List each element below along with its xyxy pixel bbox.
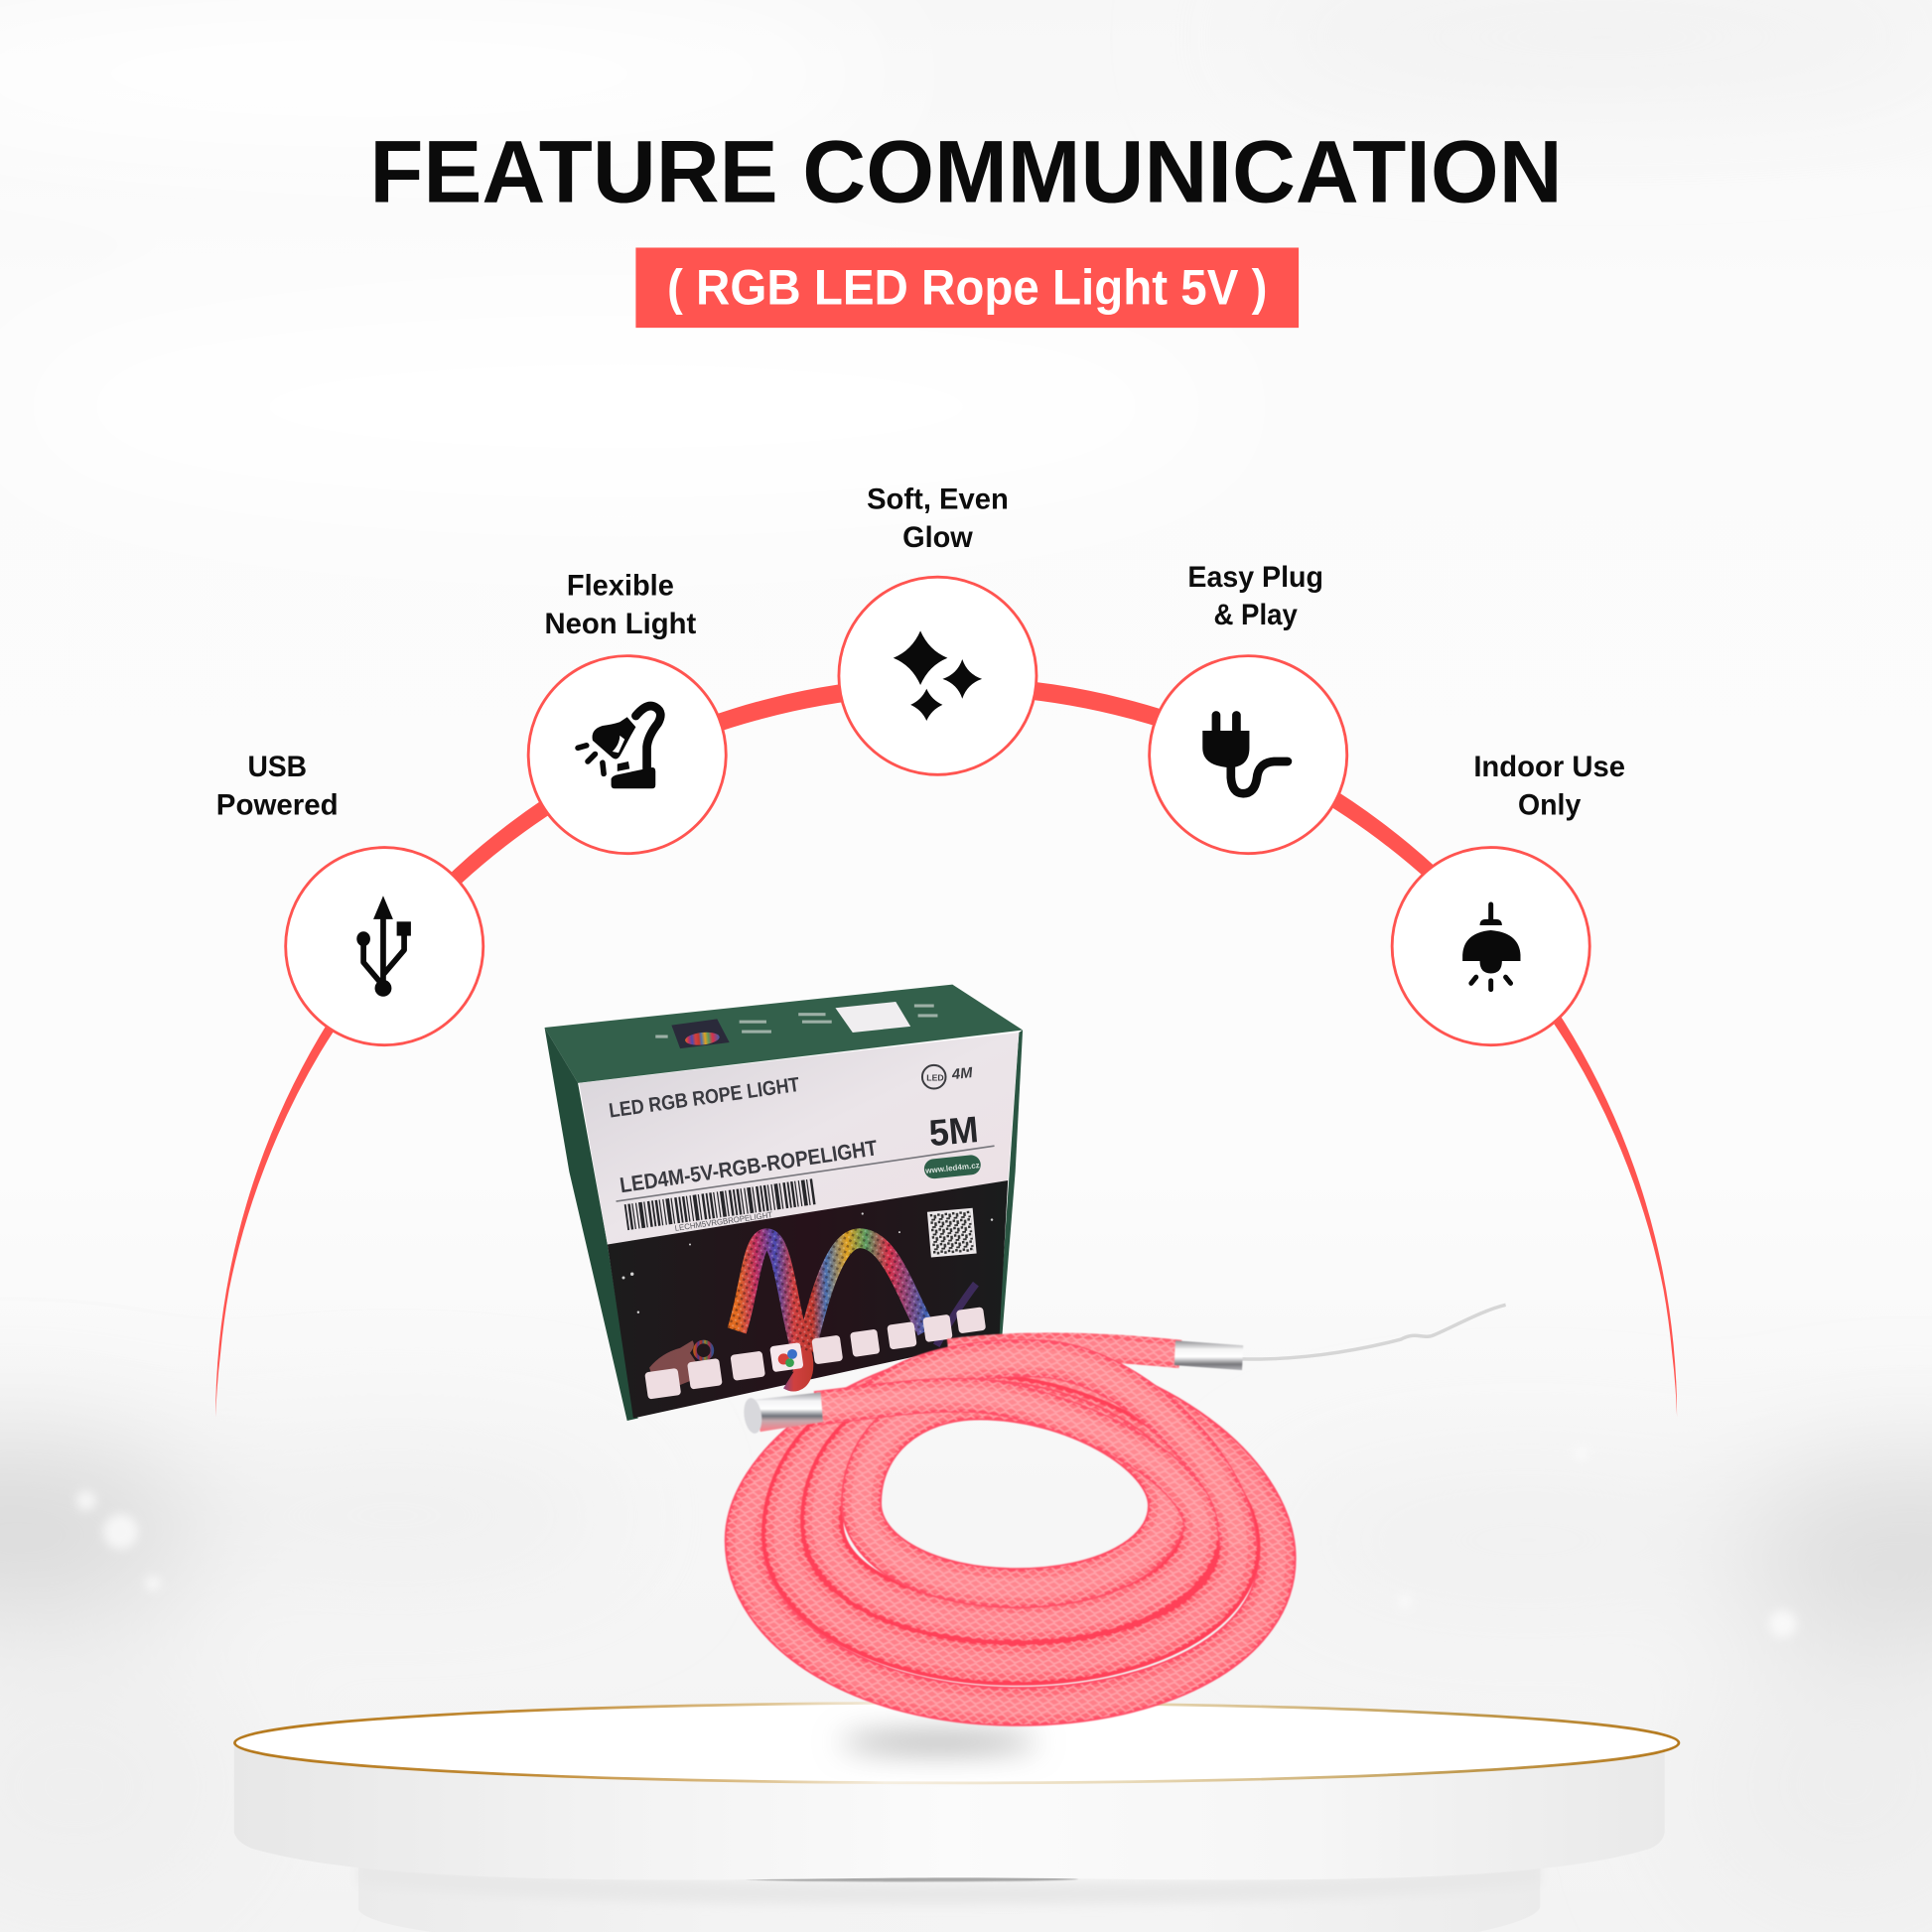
box hand and phone art bbox=[649, 1340, 712, 1385]
rope end tube right bbox=[949, 1347, 1180, 1354]
box feature tiles bbox=[644, 1307, 986, 1400]
product box bbox=[545, 985, 1023, 1421]
rope light coil bbox=[742, 1340, 1277, 1707]
label: Easy Plug & Play: & Play bbox=[1213, 599, 1298, 631]
box QR code bbox=[927, 1208, 977, 1258]
feature: easy plug and play bbox=[1150, 561, 1347, 854]
label: Soft, Even Glow: Soft, Even bbox=[867, 483, 1009, 516]
feature: soft even glow bbox=[839, 483, 1036, 774]
podium top with gold rim bbox=[234, 1703, 1679, 1783]
icon: plug bbox=[1202, 711, 1288, 793]
feature: indoor use only bbox=[1392, 751, 1625, 1045]
label: USB Powered bbox=[216, 751, 339, 821]
box dark lower panel bbox=[608, 1180, 1008, 1418]
icon: desk lamp bbox=[578, 706, 660, 788]
box logo bbox=[922, 1065, 974, 1088]
podium contact shadow bbox=[746, 1876, 1078, 1881]
podium upper tier bbox=[234, 1743, 1665, 1879]
box rainbow rope art bbox=[737, 1238, 976, 1382]
chrome end cap left bbox=[742, 1392, 823, 1435]
box label panel bbox=[579, 1033, 1019, 1244]
chrome end cap right bbox=[1174, 1340, 1243, 1370]
label: Easy Plug & Play: Easy Plug bbox=[1187, 561, 1323, 594]
label: Indoor Use Only: Indoor Use bbox=[1473, 751, 1625, 783]
box tile colour dots bbox=[778, 1349, 797, 1367]
subtitle banner bbox=[635, 247, 1299, 328]
coil ring outer bbox=[745, 1365, 1277, 1707]
rope end tube left bbox=[816, 1395, 1201, 1528]
box label rule bbox=[617, 1146, 995, 1201]
box website pill bbox=[923, 1154, 982, 1179]
label: Soft, Even Glow: Glow bbox=[902, 521, 974, 554]
wire bbox=[1242, 1305, 1506, 1359]
label: Flexible Neon Light: Neon Light bbox=[545, 608, 696, 640]
box product name: LED RGB ROPE LIGHT bbox=[608, 1073, 801, 1123]
label: Indoor Use Only bbox=[1473, 751, 1625, 821]
box logo: LED bbox=[926, 1072, 944, 1082]
tier shadow bbox=[358, 1863, 1540, 1905]
rope upper crossing tube bbox=[878, 1358, 1238, 1547]
box top print: small text bbox=[655, 1004, 937, 1038]
icon: sparkles bbox=[894, 630, 982, 721]
label: Indoor Use Only: Only bbox=[1518, 788, 1582, 821]
podium lower tier bbox=[358, 1836, 1540, 1932]
feature: flexible neon light bbox=[528, 569, 726, 854]
box left side bbox=[545, 1028, 638, 1421]
icon: pendant lamp bbox=[1462, 901, 1520, 990]
label: Flexible Neon Light: Flexible bbox=[567, 569, 674, 602]
box barcode: LECHM5VRGBROPELIGHT bbox=[674, 1210, 773, 1233]
label: Soft, Even Glow bbox=[867, 483, 1009, 554]
podium bbox=[234, 1703, 1679, 1932]
label: Easy Plug & Play bbox=[1187, 561, 1323, 631]
subtitle banner: ( RGB LED Rope Light 5V ) bbox=[667, 260, 1267, 316]
box logo: 4M bbox=[950, 1065, 974, 1083]
box top print: white label bbox=[835, 1002, 910, 1033]
coil ring inner bbox=[862, 1400, 1169, 1588]
label: Flexible Neon Light bbox=[545, 569, 696, 640]
feature: USB powered bbox=[216, 751, 483, 1045]
label: USB Powered: Powered bbox=[216, 788, 339, 821]
title: FEATURE COMMUNICATION bbox=[369, 122, 1563, 221]
box barcode bbox=[625, 1191, 814, 1233]
box stars bbox=[621, 1212, 993, 1313]
coil ring second bbox=[822, 1395, 1201, 1622]
box right edge bbox=[998, 1031, 1023, 1340]
box top print: app screen bbox=[671, 1019, 730, 1048]
coil ring third bbox=[783, 1380, 1238, 1663]
box length mark: 5M bbox=[927, 1108, 980, 1154]
box top face bbox=[545, 985, 1023, 1083]
box model number: LED4M-5V-RGB-ROPELIGHT bbox=[619, 1135, 880, 1197]
label: USB Powered: USB bbox=[247, 751, 307, 783]
floor shadow bbox=[840, 1733, 1037, 1751]
icon: usb bbox=[356, 896, 411, 997]
box website pill: www.led4m.cz bbox=[924, 1161, 980, 1175]
arc connector bbox=[215, 676, 1677, 1417]
